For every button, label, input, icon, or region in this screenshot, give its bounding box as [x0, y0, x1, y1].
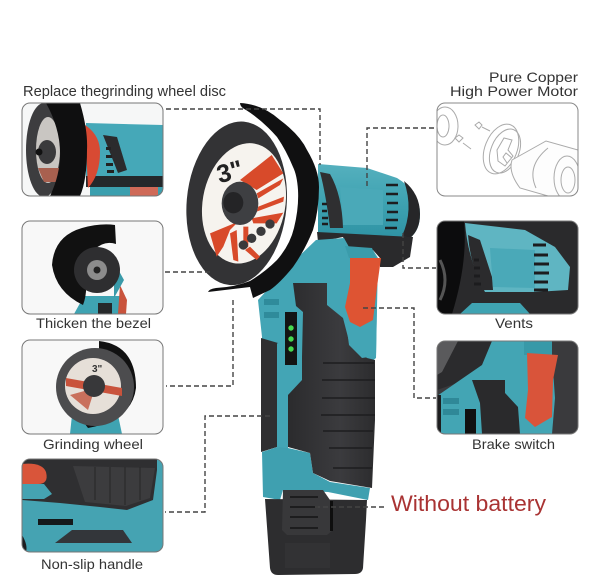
panel border: [437, 221, 578, 314]
connector: disc: [166, 109, 320, 165]
panel: motor diagram: [438, 106, 578, 196]
callout: without battery: Without battery: [391, 491, 546, 516]
connector: motor: [367, 128, 436, 186]
front vents: [322, 204, 328, 224]
connector: handle: [165, 416, 270, 512]
label: brake switch: Brake switch: [472, 436, 555, 452]
heading: replace wheel disc: Replace thegrinding wheel disc: [23, 84, 226, 100]
panel border: [437, 103, 578, 196]
led panel: [285, 312, 297, 365]
inner dark panel and rubber grip: [288, 283, 375, 488]
red sunburst: [210, 155, 284, 262]
3 inch label: 3": [214, 155, 246, 189]
heading: pure copper high power motor: High Power Motor: [450, 83, 578, 99]
connector: grinding wheel: [166, 300, 233, 386]
grip ridges: [321, 363, 375, 468]
panel: thicken the bezel: [52, 224, 127, 314]
nut: [222, 182, 258, 225]
panel border: [22, 340, 163, 434]
panel: non-slip handle: [22, 459, 163, 552]
heading: pure copper high power motor: Pure Copper: [489, 69, 578, 85]
panel border: [22, 103, 163, 196]
rear cap: [402, 181, 420, 238]
battery clip: [330, 501, 333, 531]
dark band on housing: [320, 172, 343, 228]
connector: brake: [363, 308, 436, 398]
neck vents: [264, 299, 279, 318]
battery texture: [285, 543, 330, 568]
panel border: [22, 221, 163, 314]
disc label: [193, 136, 295, 270]
label: grinding wheel: Grinding wheel: [43, 436, 143, 452]
panel: vents: [437, 221, 578, 314]
panel: grinding wheel: [56, 341, 136, 434]
lower dark band: [317, 232, 413, 267]
connector: bezel: [165, 271, 212, 273]
label: non-slip handle: Non-slip handle: [41, 556, 143, 572]
guard: [208, 103, 319, 298]
panel: grinding wheel: 3": [92, 364, 103, 375]
label: vents: Vents: [495, 315, 533, 331]
heading: pure copper high power motor: [450, 69, 578, 99]
motor housing: [318, 164, 420, 238]
teal lower side: [277, 343, 302, 450]
connector: battery: [315, 506, 384, 508]
battery: [265, 499, 367, 575]
badges: [239, 219, 275, 250]
disc assembly: [180, 117, 295, 289]
panel border: [437, 341, 578, 434]
side plate: [340, 187, 383, 225]
panel border: [22, 459, 163, 552]
connector: vents: [403, 233, 436, 268]
trigger: [345, 258, 381, 327]
panel: brake switch: [437, 341, 578, 434]
label: thicken the bezel: Thicken the bezel: [36, 315, 151, 331]
disc: [180, 117, 294, 289]
trigger teal lobe: [343, 300, 377, 358]
handle neck: [258, 238, 378, 420]
grip left strip: [261, 338, 279, 452]
battery latch: [282, 490, 333, 535]
collar: [262, 447, 370, 500]
main product: mini angle grinder: [180, 103, 420, 575]
led lights: [288, 325, 294, 352]
panel: replace wheel disc: [22, 103, 163, 197]
trigger base: [345, 246, 376, 258]
rear vents: [385, 185, 398, 228]
